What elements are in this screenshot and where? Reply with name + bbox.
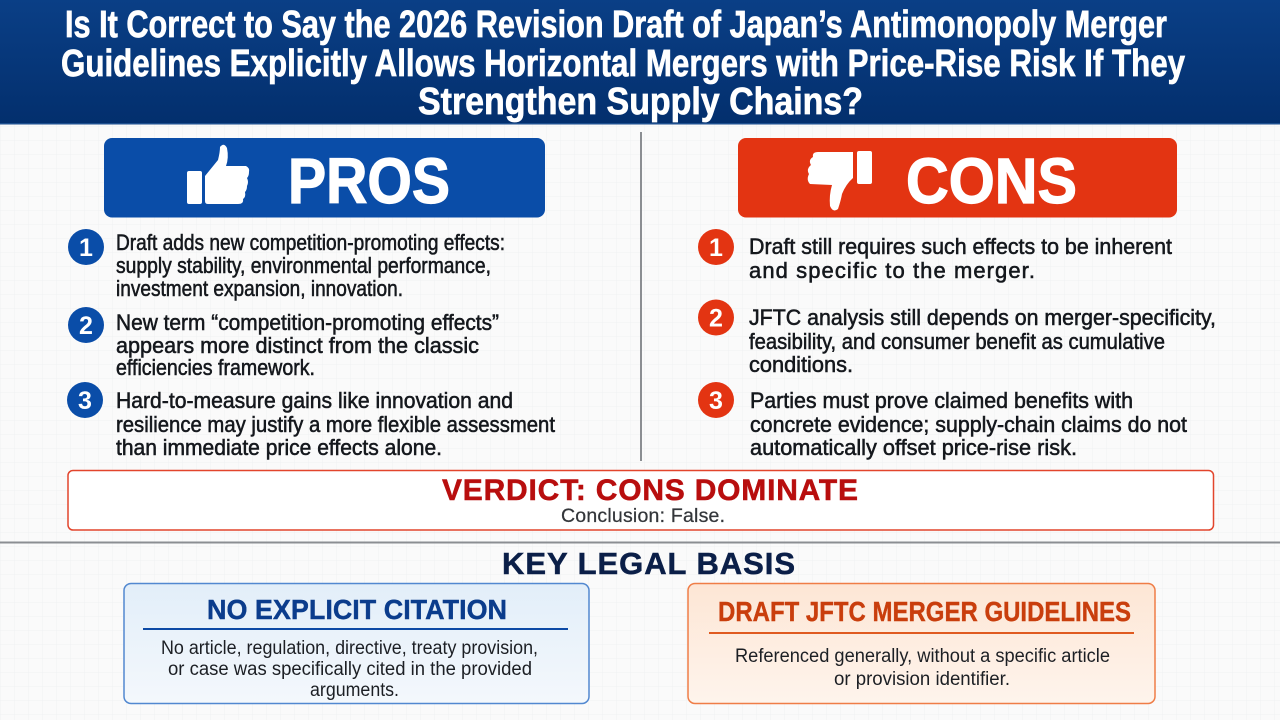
pros item 2: New term “competition-promoting effects”: [116, 310, 499, 335]
cons item 1: and specific to the merger.: [749, 258, 1035, 283]
cons item 2: JFTC analysis still depends on merger-specificity,: [749, 305, 1216, 330]
verdict box: [68, 470, 1214, 530]
pros item 2: efficiencies framework.: [116, 355, 315, 380]
cons item 3: 3: [709, 387, 723, 415]
pros item 2: [68, 307, 499, 380]
pros item 3: than immediate price effects alone.: [116, 435, 442, 460]
panel: cons: [698, 138, 1216, 460]
card: draft JFTC merger guidelines: Referenced generally, without a specific article: [735, 646, 1110, 667]
pros item 1: 1: [79, 234, 93, 262]
pros item 1: investment expansion, innovation.: [116, 276, 403, 301]
title banner: Strengthen Supply Chains?: [418, 81, 863, 123]
title banner: [0, 0, 1280, 124]
card: no explicit citation: or case was specifically cited in the provided: [168, 659, 532, 680]
icon: thumbs down: [808, 151, 872, 210]
heading: key legal basis: KEY LEGAL BASIS: [502, 546, 795, 581]
cons item 2: [698, 300, 1216, 377]
cons item 3: concrete evidence; supply-chain claims do not: [750, 412, 1187, 437]
pros item 3: Hard-to-measure gains like innovation and: [116, 388, 513, 413]
cons item 2: conditions.: [749, 352, 853, 377]
pros item 1: [68, 229, 505, 301]
pros item 1: supply stability, environmental performance,: [116, 253, 491, 278]
cons header: [738, 138, 1177, 218]
cons header: CONS: [906, 145, 1077, 217]
cons item 1: Draft still requires such effects to be inherent: [749, 234, 1172, 259]
pros header: PROS: [288, 145, 450, 217]
verdict box: Conclusion: False.: [561, 505, 725, 527]
cons item 1: [698, 229, 1172, 283]
pros item 3: resilience may justify a more flexible assessment: [116, 412, 555, 437]
cons item 1: 1: [709, 234, 723, 262]
card: no explicit citation: NO EXPLICIT CITATION: [207, 594, 507, 625]
card: no explicit citation: arguments.: [310, 680, 399, 701]
card: no explicit citation: No article, regulation, directive, treaty provision,: [161, 638, 538, 659]
cons item 3: [698, 382, 1187, 460]
pros item 1: Draft adds new competition-promoting effects:: [116, 230, 505, 255]
pros item 3: 3: [78, 387, 92, 415]
cons item 3: automatically offset price-rise risk.: [750, 435, 1077, 460]
cons item 2: 2: [709, 304, 723, 332]
card: draft JFTC merger guidelines: DRAFT JFTC MERGER GUIDELINES: [718, 596, 1131, 627]
icon: thumbs up: [187, 145, 249, 204]
pros item 2: 2: [79, 312, 93, 340]
verdict box: VERDICT: CONS DOMINATE: [442, 474, 858, 507]
panel: pros: [67, 138, 555, 460]
cons item 2: feasibility, and consumer benefit as cumulative: [749, 329, 1165, 354]
pros header: [104, 138, 545, 218]
card: draft JFTC merger guidelines: [688, 584, 1155, 704]
card: no explicit citation: [124, 584, 589, 704]
cons item 3: Parties must prove claimed benefits with: [750, 388, 1133, 413]
pros item 2: appears more distinct from the classic: [116, 333, 479, 358]
pros item 3: [67, 382, 555, 460]
card: draft JFTC merger guidelines: or provision identifier.: [834, 669, 1010, 690]
